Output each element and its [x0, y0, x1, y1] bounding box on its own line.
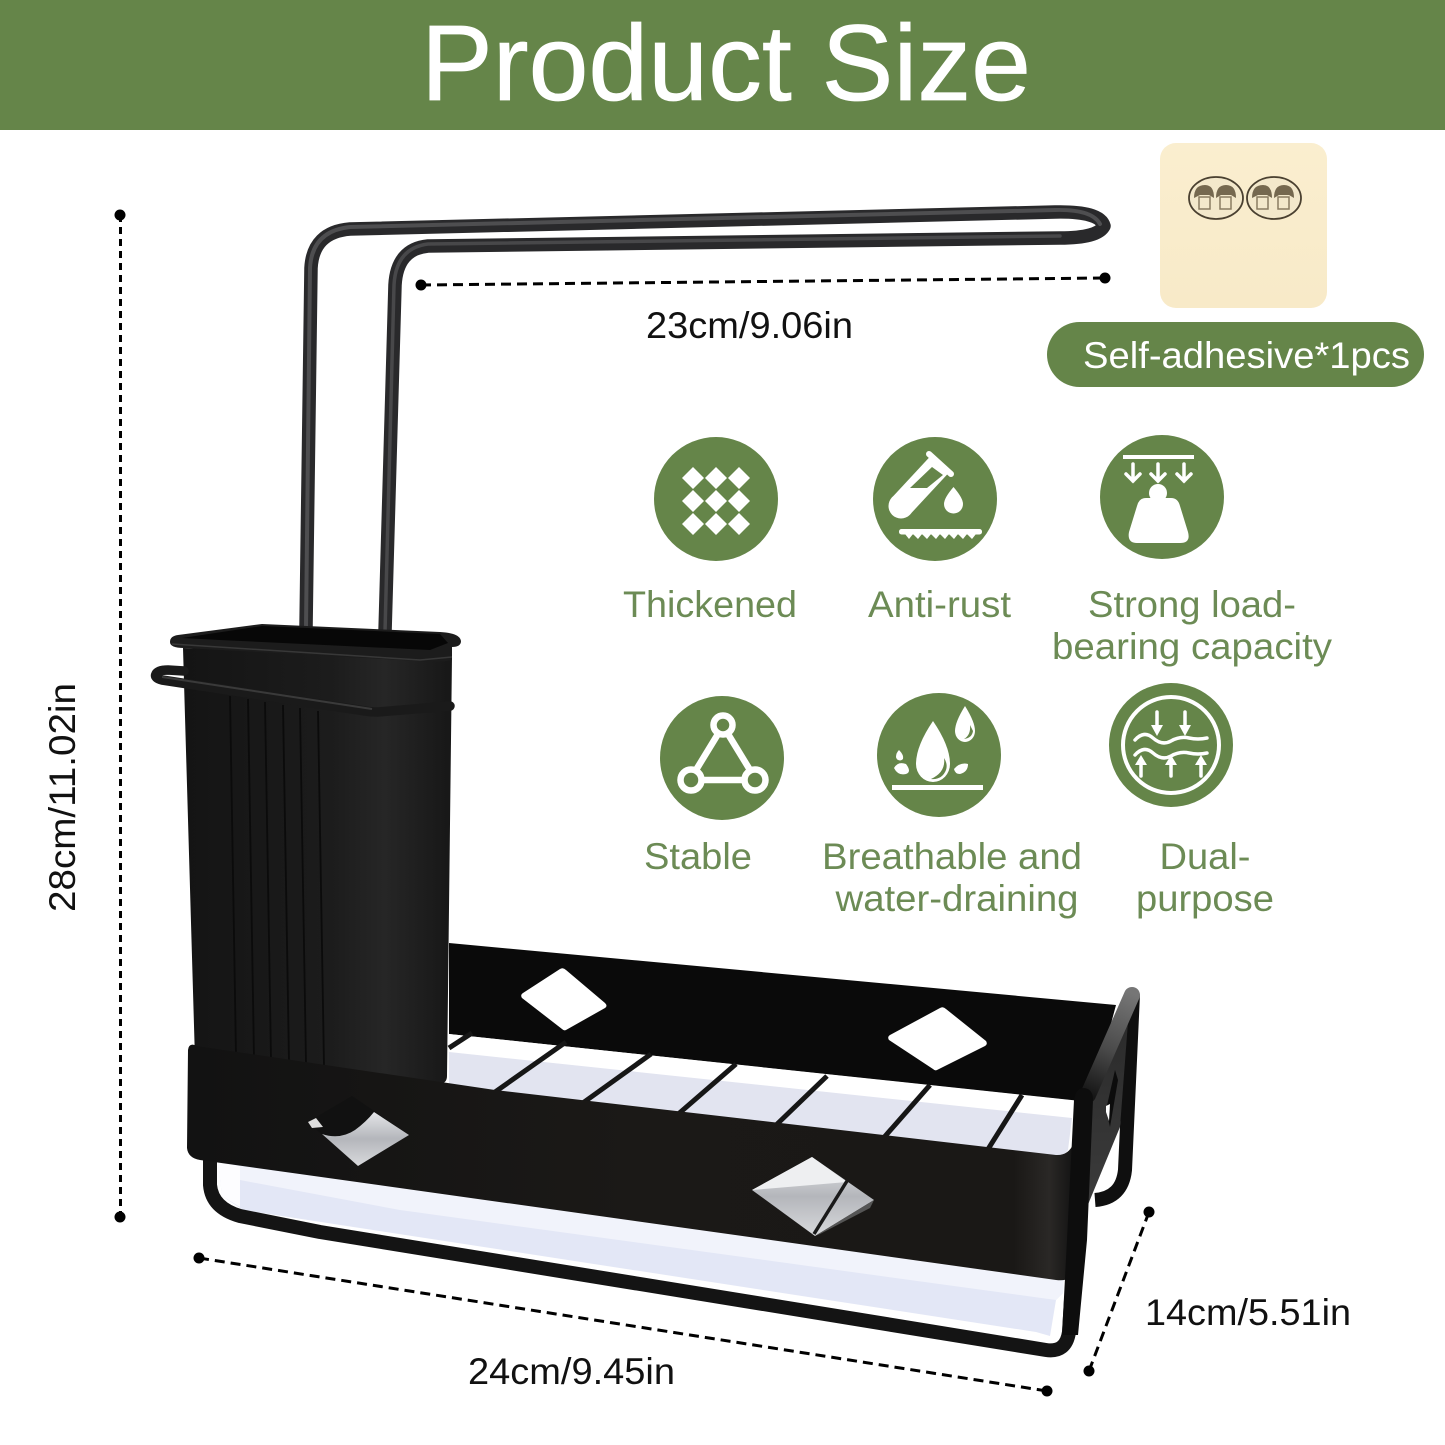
feature: load-bearing — [1052, 435, 1332, 667]
title: Product Size — [421, 2, 1031, 123]
right front diamond opening — [752, 1157, 874, 1236]
label: Anti-rust — [868, 583, 1012, 625]
feature: load-bearing: bearing capacity — [1052, 625, 1332, 667]
header banner — [0, 0, 1445, 130]
icon: diamond mesh — [654, 437, 778, 561]
icon: weight under pressure — [1100, 435, 1224, 559]
label: Breathable and — [822, 835, 1082, 877]
left front diamond opening — [308, 1096, 409, 1166]
height label: 28cm/11.02in — [41, 683, 83, 912]
holder rail wire — [156, 670, 450, 712]
white drip tray — [218, 1162, 1064, 1336]
holder rim — [170, 624, 461, 662]
product: sink caddy rack — [156, 210, 1133, 1350]
grid wires — [449, 1033, 1022, 1154]
dimension: depth — [1084, 1206, 1351, 1376]
back panel — [449, 943, 1116, 1102]
front right upright — [1062, 1088, 1093, 1335]
feature: breathable: water-draining — [834, 877, 1078, 919]
feature: anti-rust — [868, 437, 1012, 625]
depth label: 14cm/5.51in — [1145, 1291, 1351, 1333]
back diamond cut-outs — [521, 968, 606, 1030]
feature: breathable — [822, 693, 1082, 919]
label: Thickened — [623, 583, 797, 625]
icon: triangle nodes — [660, 696, 784, 820]
feature: thickened — [623, 437, 797, 625]
label: Dual- — [1160, 835, 1250, 877]
icon: water drops — [877, 693, 1001, 817]
pill: self-adhesive count — [1047, 322, 1424, 387]
holder ribs — [230, 696, 324, 1066]
label: Stable — [644, 835, 752, 877]
feature: dual-purpose — [1109, 683, 1274, 919]
dimension: width — [194, 1252, 1052, 1396]
feature: dual-purpose: purpose — [1136, 877, 1274, 919]
tray seen through grid — [449, 1034, 1078, 1160]
bottom frame wire — [210, 1155, 1071, 1350]
dimension: arm length — [416, 272, 1110, 346]
sponge holder box — [156, 624, 461, 1084]
back right wire leg — [1095, 994, 1133, 1200]
label: Strong load- — [1088, 583, 1296, 625]
self-adhesive swatch — [1160, 143, 1327, 308]
side panel — [1080, 995, 1132, 1240]
socket marks — [1189, 177, 1301, 219]
icon: test tube and drop — [873, 437, 997, 561]
width label: 24cm/9.45in — [468, 1350, 675, 1392]
upper towel wire — [306, 210, 1104, 632]
front band — [187, 1045, 1076, 1280]
arm length label: 23cm/9.06in — [646, 304, 853, 346]
dimension: height — [41, 210, 126, 1222]
feature: stable — [644, 696, 784, 877]
pill: self-adhesive count: Self-adhesive*1pcs — [1083, 334, 1410, 376]
icon: compressed waves — [1109, 683, 1233, 807]
